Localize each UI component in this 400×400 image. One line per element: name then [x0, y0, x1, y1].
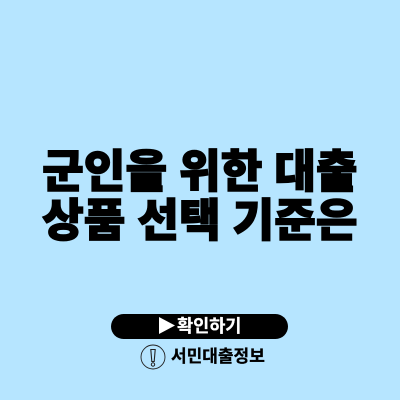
- button: confirm: [111, 314, 288, 339]
- brand name: 서민대출정보: [171, 347, 265, 366]
- brand row: [140, 344, 265, 370]
- title line 1: 군인을 위한 대출: [42, 146, 358, 197]
- title: [42, 146, 358, 246]
- title line 2: 상품 선택 기준은: [42, 195, 358, 246]
- icon: exclamation circle: [140, 344, 166, 370]
- button label: 확인하기: [177, 316, 241, 336]
- icon: play triangle: [159, 317, 175, 334]
